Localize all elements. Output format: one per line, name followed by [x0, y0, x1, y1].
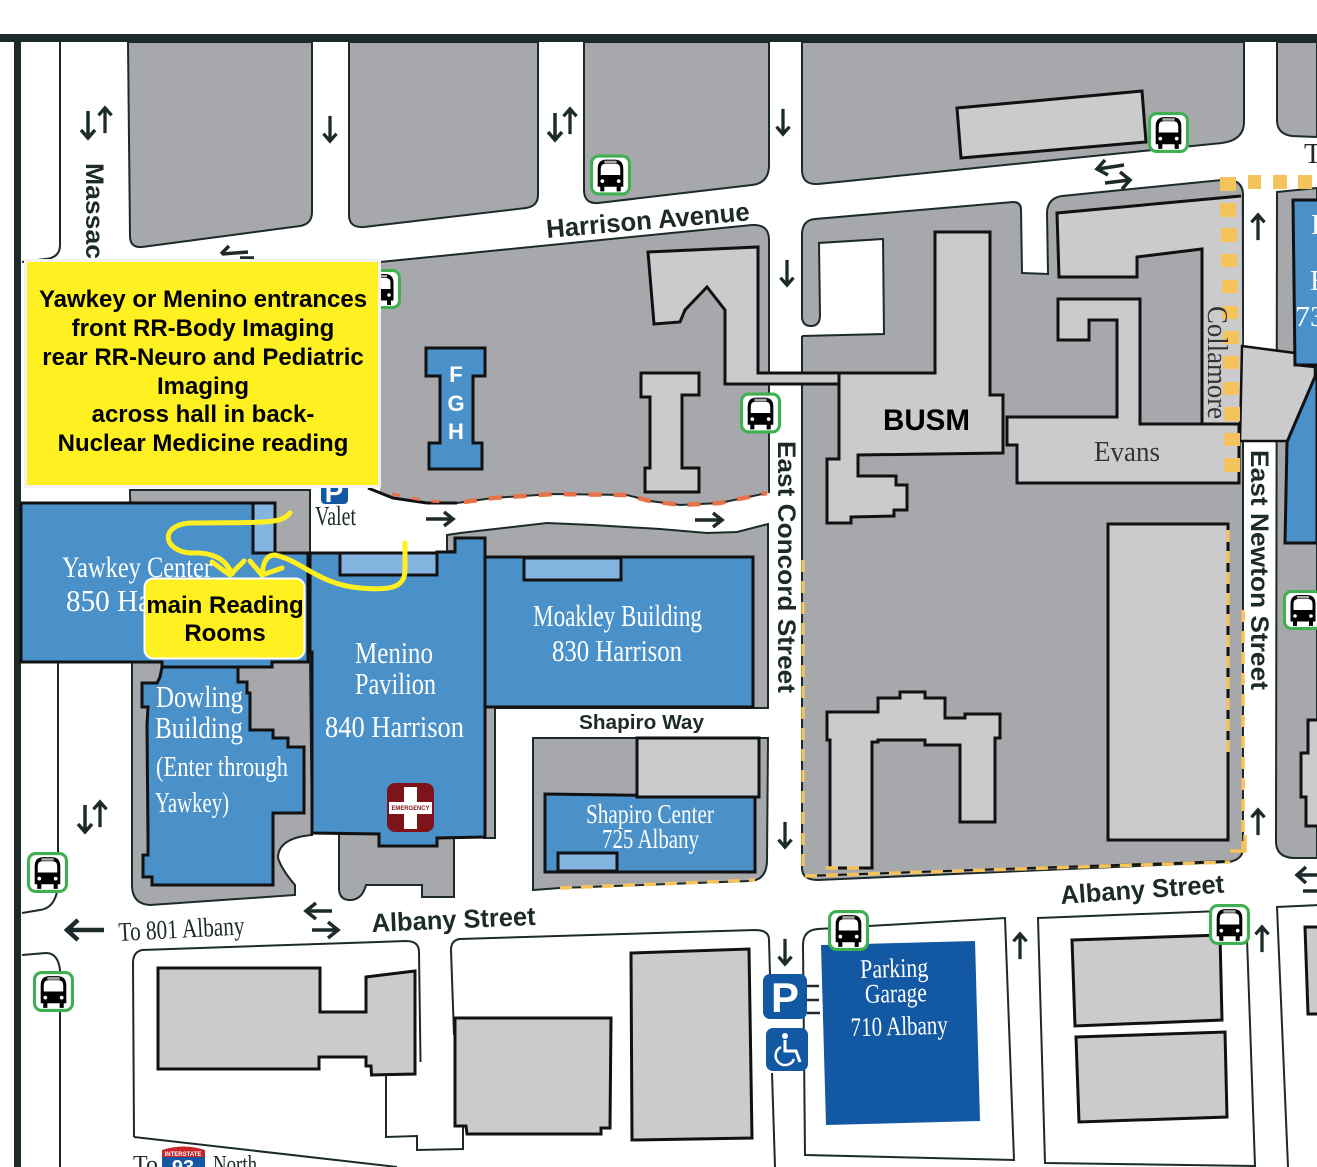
arrows: traffic direction [67, 108, 1317, 964]
building: Shapiro grey annex [637, 738, 759, 797]
pathway: dashed boundary [560, 524, 1245, 888]
callout: reading directions: across hall in back- [92, 401, 314, 428]
building: Dowling: (Enter through [156, 751, 288, 783]
building: Menino Pavilion [310, 538, 485, 846]
icon: garage parking [763, 974, 820, 1021]
building: FGH [426, 348, 485, 469]
building: I-shaped [641, 373, 699, 492]
route: yellow hand-drawn arrows [168, 513, 405, 589]
building: north of Harrison [957, 91, 1146, 158]
building: Albany east upper [1072, 935, 1222, 1026]
building: north-east wing [1057, 196, 1243, 440]
building: Shapiro Center [545, 794, 755, 872]
callout: main reading rooms [144, 578, 304, 658]
street labels: Massac [80, 163, 108, 259]
panel: grey city blocks [128, 42, 1317, 905]
building: Albany center [631, 949, 752, 1140]
callout: main reading rooms: Rooms [184, 620, 266, 647]
street labels: Albany Street [1059, 869, 1225, 910]
street labels: Evans [1094, 436, 1160, 468]
street labels: BUSM [883, 404, 970, 437]
building: Moakley [485, 557, 753, 707]
building: Collamore connector [1240, 346, 1315, 441]
callout: reading directions: Yawkey or Menino entrances [39, 286, 367, 313]
building: Yawkey Center: Yawkey Center [62, 551, 212, 584]
building: Evans [1007, 299, 1239, 483]
building: Parking Garage: Garage [864, 977, 927, 1009]
icon: bus stops [29, 114, 1317, 1010]
street labels: Albany Street [371, 901, 536, 938]
building: Parking Garage: 710 Albany [850, 1010, 948, 1042]
icon: valet parking: P [325, 477, 343, 508]
building: east blue lower [1285, 372, 1317, 543]
building: BUSM [827, 232, 1003, 523]
building: Moakley: Moakley Building [533, 598, 702, 633]
building: north wing [648, 247, 839, 384]
callout: main reading rooms: main Reading [146, 592, 304, 619]
icon: valet parking [321, 470, 348, 508]
building: lower BUSM block [827, 692, 1000, 868]
icon: interstate shield: INTERSTATE [165, 1152, 201, 1158]
panel: white lower blocks [133, 905, 1317, 1167]
building: Menino Pavilion: 840 Harrison [325, 709, 464, 744]
building: FGH: H [448, 419, 464, 444]
icon: garage parking: P [771, 974, 799, 1021]
building: Parking Garage: Parking [860, 952, 929, 984]
icon: emergency: EMERGENCY [392, 805, 430, 812]
icon: emergency [387, 783, 434, 832]
callout: reading directions: Nuclear Medicine reading [58, 430, 348, 457]
road: entrance line with dashed orange [368, 488, 767, 505]
street labels: East Newton Street [1245, 450, 1273, 691]
icon: accessible parking [766, 1028, 808, 1071]
building: FGH: F [449, 362, 463, 387]
building: Parking Garage [821, 941, 980, 1125]
building: Moakley: 830 Harrison [552, 633, 682, 668]
building: long rectangle [1108, 524, 1228, 840]
building: Menino Pavilion: Menino [355, 635, 433, 670]
street labels: East Concord Street [772, 441, 800, 694]
building: east blue upper [1293, 200, 1317, 365]
building: far east edge lower [1305, 927, 1317, 1014]
building: lower west block [158, 968, 415, 1075]
building: Menino Pavilion: Pavilion [355, 666, 436, 701]
callout: reading directions: front RR-Body Imaging [72, 315, 334, 342]
building: Dowling: Dowling [156, 679, 243, 714]
callout: reading directions: rear RR-Neuro and Pediatric [42, 344, 364, 371]
building: Yawkey Center [21, 503, 308, 667]
panel: street outlines west [22, 42, 60, 1167]
callout: reading directions: Imaging [157, 373, 249, 400]
building: Shapiro Center: 725 Albany [602, 824, 699, 854]
pathway: large dotted route [1220, 175, 1312, 472]
building: Dowling: Yawkey) [155, 787, 229, 819]
building: Shapiro Center: Shapiro Center [586, 799, 714, 829]
building: Albany east lower [1076, 1032, 1227, 1122]
building: Dowling [142, 667, 304, 885]
icon: interstate shield [162, 1146, 205, 1167]
building: north-east wing outline [1057, 196, 1241, 424]
building: Yawkey Center: 850 Ha [66, 583, 151, 618]
building: Albany west [455, 1018, 611, 1134]
street labels: To 801 Albany [118, 910, 246, 947]
building: Dowling: Building [155, 710, 243, 745]
building: far east [1301, 720, 1317, 826]
street labels: Valet [315, 501, 356, 531]
street labels: Collamore [1201, 306, 1233, 419]
callout: reading directions [26, 260, 380, 486]
building: FGH: G [447, 391, 465, 416]
panel: courtyard cutout [800, 239, 884, 336]
street labels: Shapiro Way [579, 712, 705, 734]
street labels: Harrison Avenue [545, 196, 751, 244]
